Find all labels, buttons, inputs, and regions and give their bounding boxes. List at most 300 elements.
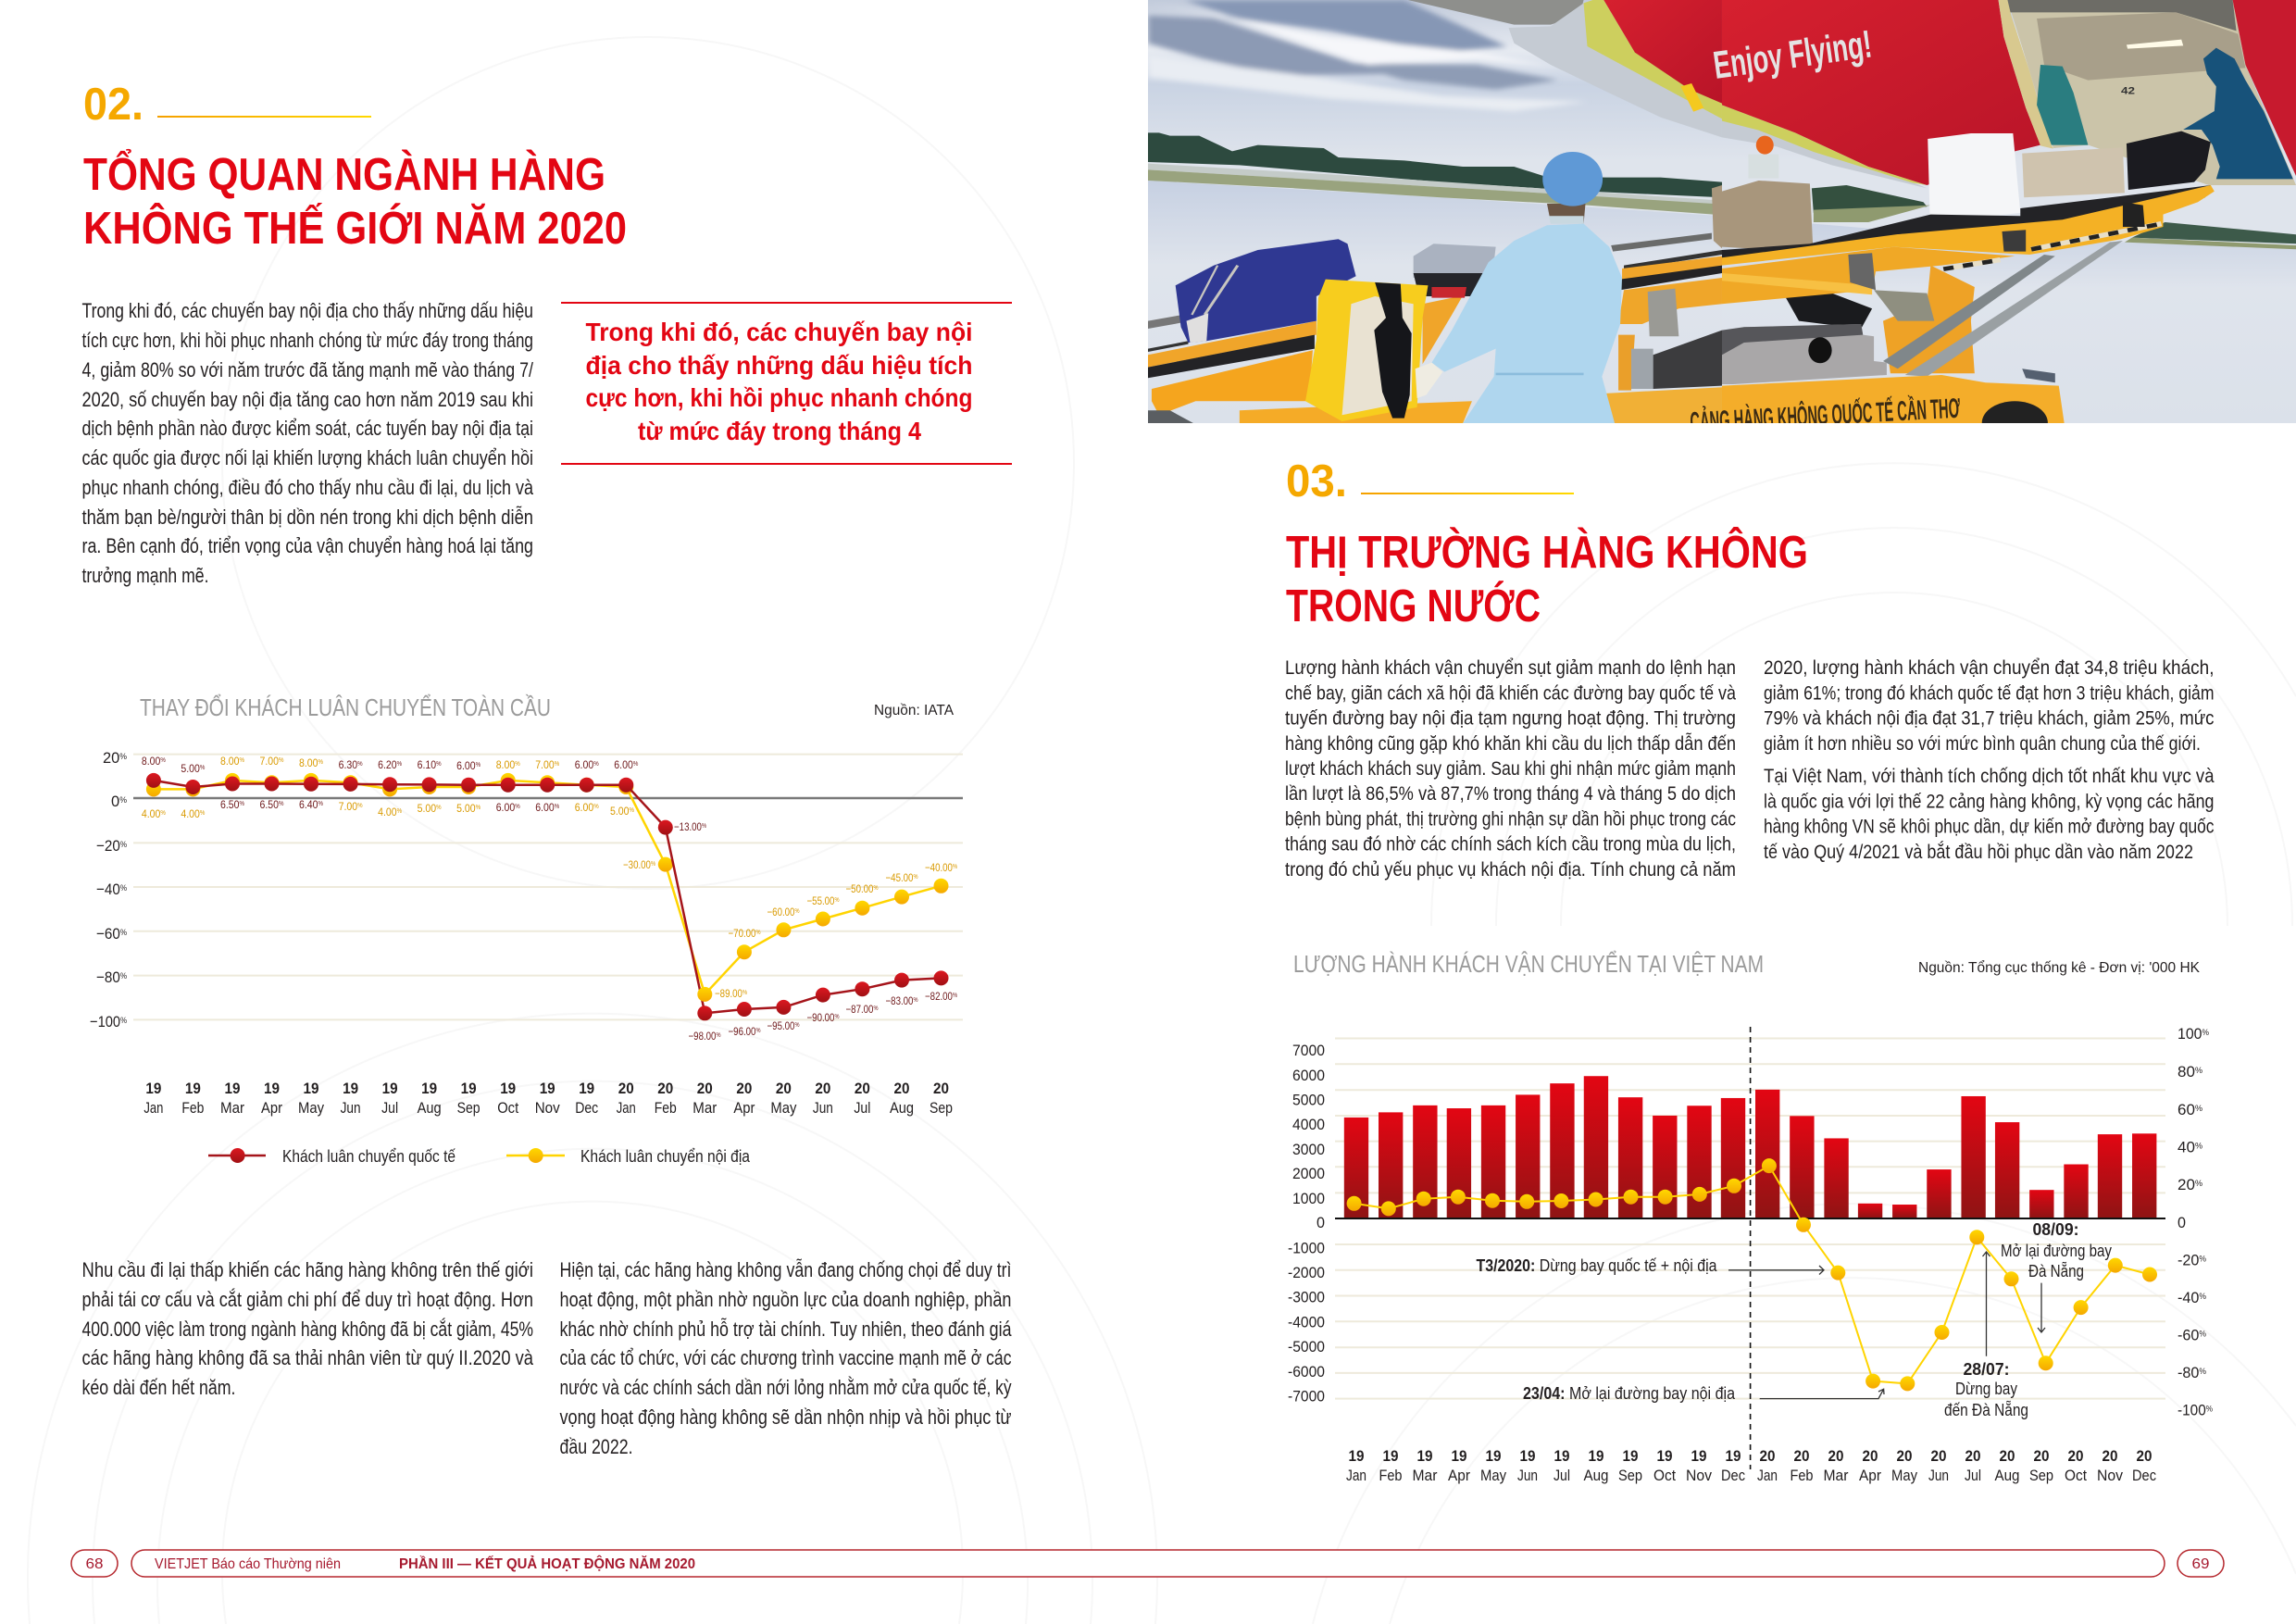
- blue bag: [1176, 239, 1356, 343]
- right axis labels: 60: [2177, 1101, 2195, 1118]
- title: section 02: TỔNG QUAN NGÀNH HÀNG: [83, 149, 605, 200]
- data labels: −70.00: [728, 927, 763, 940]
- x axis labels: 19: [461, 1080, 477, 1097]
- section number 03: 03.: [1286, 456, 1347, 506]
- x axis labels: 20: [1828, 1447, 1844, 1465]
- text block: section 03 column 1: [1285, 657, 1736, 881]
- x axis labels: 20: [776, 1080, 792, 1097]
- data labels: %: [913, 997, 918, 1004]
- x axis labels: Jun: [1928, 1467, 1949, 1484]
- title: section 03: TRONG NƯỚC: [1286, 581, 1541, 631]
- annotation: Da Nang reopening: Đà Nẵng: [2028, 1262, 2084, 1280]
- left axis labels: -7000: [1288, 1387, 1325, 1405]
- data labels: %: [357, 761, 363, 768]
- right axis labels: %: [2195, 1104, 2202, 1113]
- y axis labels: %: [120, 1016, 127, 1025]
- data labels: %: [515, 761, 520, 768]
- text block: section 02 intro: 4, giảm 80% so với năm trước đã tăng mạnh mẽ vào tháng 7/: [81, 358, 534, 381]
- x axis labels: 20: [2033, 1447, 2050, 1465]
- text block: section 02 intro: phục nhanh chóng, điều đó cho thấy nhu cầu đi lại, du lịch và: [81, 476, 534, 499]
- boxes: [2022, 147, 2125, 197]
- x axis labels: Jul: [381, 1099, 398, 1117]
- x axis labels: Feb: [1791, 1467, 1813, 1484]
- data labels: −87.00: [846, 1003, 880, 1016]
- text block: section 02 intro: ra. Bên cạnh đó, triển vọng của vận chuyển hàng hoá lại tăng: [81, 534, 533, 557]
- text block: section 03 column 2: giảm ít hơn nhiều so với mức bình quân chung của thế giới.: [1764, 733, 2201, 755]
- annotation: April reopening: 23/04: Mở lại đường bay nội địa: [1523, 1384, 1736, 1403]
- text block: lower right column: đầu 2022.: [559, 1435, 633, 1458]
- x axis labels: Mar: [1413, 1467, 1438, 1484]
- chart heading: Vietnam passengers: [1293, 950, 2200, 978]
- right axis labels: 20: [2177, 1176, 2195, 1193]
- x axis labels: Jun: [813, 1099, 833, 1117]
- text block: section 02 intro: Trong khi đó, các chuyến bay nội địa cho thấy những dấu hiệu: [81, 299, 533, 322]
- x axis labels: May: [1480, 1467, 1506, 1484]
- left axis labels: 0: [1316, 1214, 1325, 1231]
- y axis labels: −80: [96, 968, 123, 986]
- data labels: %: [515, 804, 520, 810]
- callout: pull quote: [561, 302, 1012, 465]
- data labels: 6.00: [456, 759, 478, 772]
- right axis labels: %: [2195, 1179, 2202, 1188]
- x axis labels: Nov: [2097, 1467, 2123, 1484]
- data labels: %: [397, 808, 402, 815]
- machine: [1722, 324, 1887, 384]
- y axis labels: 20: [103, 749, 120, 767]
- text block: lower left column: [81, 1258, 534, 1399]
- data labels: 5.00: [418, 802, 439, 815]
- right axis labels: %: [2199, 1330, 2206, 1339]
- data labels: 8.00: [496, 758, 518, 771]
- text block: section 03 column 1: tuyến đường bay nội địa tạm ngưng hoạt động. Thị trường: [1285, 707, 1736, 730]
- x axis labels: Mar: [693, 1099, 718, 1117]
- x axis labels: 20: [1965, 1447, 1981, 1465]
- right axis labels: %: [2199, 1292, 2206, 1301]
- x axis labels: 19: [1554, 1447, 1570, 1465]
- data labels: −45.00: [885, 871, 920, 884]
- text block: lower right column: nước và các chính sách dần nới lỏng nhằm mở cửa quốc tế, kỳ: [559, 1376, 1011, 1399]
- data labels: %: [476, 805, 480, 811]
- data labels: %: [834, 897, 839, 904]
- text block: section 02 intro: [81, 299, 534, 587]
- x axis labels: 19: [1691, 1447, 1707, 1465]
- x axis labels: 19: [1589, 1447, 1603, 1465]
- x axis labels: 20: [933, 1080, 949, 1097]
- annotation: Da Nang reopening: Mở lại đường bay: [2001, 1242, 2112, 1260]
- section number 02: 02.: [83, 80, 144, 130]
- data labels: 7.00: [339, 800, 360, 813]
- data labels: 6.30: [339, 758, 360, 771]
- text block: section 03 column 2: tế vào Quý 4/2021 và bắt đầu hồi phục dần vào năm 2022: [1764, 842, 2193, 863]
- text block: section 03 column 2: hàng không VN sẽ khôi phục dần, dự kiến mở đường bay quốc: [1764, 817, 2215, 837]
- data labels: −13.00: [674, 820, 708, 833]
- x axis labels: 19: [1383, 1447, 1398, 1465]
- data labels: %: [279, 801, 283, 807]
- right axis labels: %: [2202, 1028, 2209, 1037]
- x axis labels: 19: [1348, 1447, 1365, 1465]
- page number 68: 68: [85, 1556, 104, 1572]
- page number 69: [2177, 1550, 2224, 1577]
- data labels: %: [555, 761, 559, 768]
- data labels: 8.00: [142, 755, 163, 768]
- x axis labels: Sep: [930, 1099, 953, 1117]
- data labels: %: [742, 990, 747, 996]
- x axis labels: 20: [855, 1080, 870, 1097]
- conveyor left: [1148, 321, 1316, 368]
- page number 69: 69: [2192, 1556, 2210, 1572]
- data labels: 6.40: [299, 798, 320, 811]
- annotation: march stop: T3/2020: Dừng bay quốc tế + nội địa: [1476, 1256, 1717, 1275]
- callout: pull quote: Trong khi đó, các chuyến bay nội: [585, 318, 972, 346]
- data labels: %: [716, 1032, 720, 1039]
- worker: [1547, 204, 1586, 224]
- right axis labels: -80: [2177, 1364, 2201, 1381]
- data labels: −96.00: [728, 1025, 763, 1038]
- data labels: 8.00: [299, 756, 320, 769]
- x axis labels: Jan: [617, 1099, 636, 1117]
- x axis labels: Apr: [1859, 1467, 1881, 1484]
- wing and belly: [1408, 0, 1584, 25]
- x axis labels: Jan: [1346, 1467, 1366, 1484]
- x axis labels: Jan: [144, 1099, 163, 1117]
- text block: section 03 column 2: Tại Việt Nam, với thành tích chống dịch tốt nhất khu vực và: [1764, 766, 2215, 787]
- text block: section 03 column 1: lần lượt là 86,5% và 87,7% trong tháng 4 và tháng 5 do dịch: [1285, 783, 1736, 805]
- photo left half: sky, worker, yellow container: [1148, 0, 1722, 423]
- x axis labels: Nov: [535, 1099, 560, 1117]
- text block: lower right column: khác nhờ chính phủ hỗ trợ tài chính. Tuy nhiên, theo đánh giá: [559, 1318, 1012, 1341]
- data labels: −95.00: [767, 1019, 802, 1032]
- annotation: April reopening: [1523, 1384, 1884, 1403]
- text block: lower left column: 400.000 việc làm trong ngành hàng không đã bị cắt giảm, 45%: [81, 1318, 533, 1341]
- x axis labels: Dec: [1721, 1467, 1745, 1484]
- data labels: %: [794, 1022, 800, 1029]
- legend: global chart: Khách luân chuyển quốc tế: [282, 1147, 455, 1166]
- y axis labels: %: [120, 883, 127, 893]
- right axis labels: -60: [2177, 1326, 2201, 1344]
- text block: section 02 intro: 2020, số chuyến bay nội địa tăng cao hơn năm 2019 sau khi: [81, 388, 533, 411]
- running header pill: PHẦN III — KẾT QUẢ HOẠT ĐỘNG NĂM 2020: [399, 1555, 695, 1572]
- y axis labels: %: [120, 971, 127, 981]
- annotation: Da Nang stop: Dừng bay: [1955, 1380, 2017, 1398]
- title: section 03: THỊ TRƯỜNG HÀNG KHÔNG: [1286, 527, 1808, 578]
- data labels: %: [834, 1014, 839, 1020]
- text block: section 03 column 1: bệnh bùng phát, thị trường ghi nhận sự dần hồi phục trong các: [1285, 809, 1736, 830]
- data labels: %: [200, 810, 205, 817]
- chart heading: Vietnam passengers: Nguồn: Tổng cục thống kê - Đơn vị: '000 HK: [1918, 959, 2200, 976]
- rails: [1148, 315, 1183, 329]
- right axis labels: 100: [2177, 1025, 2203, 1043]
- data labels: 6.20: [378, 758, 399, 771]
- data labels: %: [436, 761, 442, 768]
- data labels: −89.00: [715, 987, 749, 1000]
- x axis labels: 20: [697, 1080, 713, 1097]
- data labels: %: [436, 805, 442, 811]
- x axis labels: 19: [500, 1080, 516, 1097]
- x axis labels: Apr: [733, 1099, 755, 1117]
- conveyor belt: [1722, 185, 2211, 262]
- x axis labels: Sep: [457, 1099, 480, 1117]
- x axis labels: 19: [1416, 1447, 1433, 1465]
- text block: section 03 column 2: là quốc gia với lợi thế 22 cảng hàng không, kỳ vọng các hãng: [1764, 791, 2215, 813]
- x axis labels: Oct: [2065, 1467, 2087, 1484]
- data labels: 4.00: [142, 807, 163, 820]
- x axis labels: [1346, 1447, 2156, 1484]
- y axis labels: %: [119, 752, 127, 761]
- text block: lower left column: các hãng hàng không đã sa thải nhân viên từ quý II.2020 và: [81, 1346, 534, 1369]
- text block: lower right column: của các tổ chức, với các chương trình vaccine mạnh mẽ ở các: [559, 1346, 1011, 1369]
- line series: [1347, 1158, 2157, 1391]
- data labels: 6.50: [220, 798, 242, 811]
- running header pill: VIETJET Báo cáo Thường niên: [155, 1556, 341, 1572]
- data labels: %: [913, 874, 918, 881]
- data labels: −83.00: [885, 994, 920, 1007]
- data labels: %: [318, 801, 323, 807]
- x axis labels: 20: [618, 1080, 634, 1097]
- x axis labels: Feb: [1379, 1467, 1402, 1484]
- text block: lower right column: Hiện tại, các hãng hàng không vẫn đang chống chọi để duy trì: [559, 1258, 1011, 1281]
- x axis labels: 20: [736, 1080, 752, 1097]
- series: domestic: [146, 773, 948, 994]
- combo chart: Vietnam passengers: [1288, 1025, 2213, 1484]
- x axis labels: [144, 1080, 953, 1117]
- text block: section 03 column 1: tháng sau đó nhờ các chính sách kích cầu trong mùa du lịch,: [1285, 833, 1736, 856]
- x axis labels: Apr: [261, 1099, 282, 1117]
- x axis labels: Aug: [1583, 1467, 1609, 1484]
- right axis labels: %: [2195, 1141, 2202, 1150]
- text block: section 03 column 1: Lượng hành khách vận chuyển sụt giảm mạnh do lệnh hạn: [1285, 657, 1736, 679]
- data labels: %: [397, 761, 402, 768]
- x axis labels: May: [1891, 1467, 1917, 1484]
- callout: pull quote: từ mức đáy trong tháng 4: [638, 417, 921, 445]
- left axis labels: 5000: [1292, 1091, 1325, 1109]
- x axis labels: Sep: [1618, 1467, 1642, 1484]
- x axis labels: 19: [1726, 1447, 1741, 1465]
- title: section 02: [83, 149, 627, 254]
- x axis labels: 20: [2102, 1447, 2118, 1465]
- x axis labels: Oct: [1653, 1467, 1676, 1484]
- x axis labels: 20: [2068, 1447, 2083, 1465]
- right axis labels: %: [2206, 1404, 2213, 1413]
- data labels: 7.00: [259, 755, 281, 768]
- x axis labels: 19: [145, 1080, 161, 1097]
- text block: section 03 column 1: chế bay, giãn cách xã hội đã khiến các đường bay quốc tế và: [1285, 683, 1736, 704]
- data labels: −90.00: [807, 1011, 842, 1024]
- x axis labels: 19: [540, 1080, 555, 1097]
- series: international: [146, 773, 948, 1020]
- y axis labels: %: [120, 840, 127, 849]
- text block: section 03 column 2: [1764, 657, 2215, 863]
- y axis labels: %: [120, 928, 127, 937]
- data labels: −60.00: [767, 906, 802, 918]
- text block: lower left column: Nhu cầu đi lại thấp khiến các hãng hàng không trên thế giới: [81, 1258, 533, 1281]
- x axis labels: Jul: [1965, 1467, 1981, 1484]
- x axis labels: 20: [894, 1080, 909, 1097]
- x axis labels: Feb: [655, 1099, 677, 1117]
- annotation: Da Nang reopening: 08/09:: [2033, 1220, 2079, 1239]
- data labels: 6.50: [259, 798, 281, 811]
- vehicle: [1722, 375, 2065, 423]
- data labels: %: [953, 993, 957, 999]
- right axis labels: %: [2195, 1066, 2202, 1075]
- text block: lower left column: kéo dài đến hết năm.: [81, 1376, 235, 1399]
- data labels: %: [873, 1006, 878, 1012]
- y axis labels: %: [119, 795, 127, 805]
- right axis labels: [2177, 1025, 2213, 1418]
- x axis labels: Feb: [181, 1099, 204, 1117]
- yellow container: [1305, 280, 1428, 421]
- legend: global chart: Khách luân chuyển nội địa: [580, 1147, 751, 1166]
- x axis labels: 19: [1622, 1447, 1639, 1465]
- x axis labels: 19: [1520, 1447, 1535, 1465]
- callout: pull quote: cực hơn, khi hồi phục nhanh chóng: [585, 383, 972, 412]
- text block: lower right column: hoạt động, một phần nhờ nguồn lực của doanh nghiệp, phần: [559, 1288, 1011, 1311]
- photo right half: fuselage, cargo door, conveyor: [1722, 0, 2296, 444]
- x axis labels: 20: [815, 1080, 830, 1097]
- data labels: 6.00: [496, 801, 518, 814]
- data labels: 4.00: [378, 806, 399, 818]
- text block: section 03 column 1: trong đó chủ yếu phục vụ khách nội địa. Tính chung cả năm: [1285, 859, 1736, 881]
- left axis labels: 3000: [1292, 1141, 1325, 1158]
- x axis labels: Dec: [2132, 1467, 2156, 1484]
- x axis labels: Aug: [1994, 1467, 2020, 1484]
- data labels: %: [630, 807, 634, 814]
- left axis labels: 4000: [1292, 1116, 1325, 1133]
- left axis labels: [1288, 1042, 1325, 1405]
- data labels: %: [633, 761, 638, 768]
- chart heading: global passengers: [140, 693, 954, 721]
- data labels: 6.00: [575, 801, 596, 814]
- line chart: global passenger change: [90, 749, 963, 1117]
- data labels: %: [794, 908, 800, 915]
- left axis labels: 1000: [1292, 1190, 1325, 1207]
- right axis labels: 0: [2177, 1214, 2186, 1231]
- x axis labels: Dec: [575, 1099, 599, 1117]
- data labels: %: [702, 823, 706, 830]
- text block: section 03 column 1: hàng không cũng gặp khó khăn khi cầu du lịch thấp dẫn đến: [1285, 733, 1736, 755]
- text block: section 03 column 2: 2020, lượng hành khách vận chuyển đạt 34,8 triệu khách,: [1764, 657, 2215, 679]
- data labels: %: [755, 1028, 761, 1034]
- text block: section 03 column 1: lượt khách khách suy giảm. Sau khi ghi nhận mức giảm mạnh: [1285, 758, 1736, 780]
- data labels: %: [318, 759, 323, 766]
- chart heading: Vietnam passengers: LƯỢNG HÀNH KHÁCH VẬN CHUYỂN TẠI VIỆT NAM: [1293, 950, 1764, 978]
- y axis labels: −40: [96, 881, 123, 898]
- x axis labels: Sep: [2029, 1467, 2053, 1484]
- x axis labels: Jun: [341, 1099, 361, 1117]
- title: section 03: [1286, 527, 1808, 631]
- data labels: %: [357, 803, 363, 809]
- data labels: 6.00: [614, 758, 636, 771]
- data labels: 6.10: [418, 758, 439, 771]
- text block: section 02 intro: các quốc gia được nối lại khiến lượng khách luân chuyển hồi: [81, 446, 533, 469]
- callout: pull quote: địa cho thấy những dấu hiệu tích: [585, 351, 972, 380]
- left axis labels: -2000: [1288, 1264, 1325, 1281]
- right axis labels: 80: [2177, 1063, 2195, 1081]
- data labels: −40.00: [925, 861, 959, 874]
- x axis labels: 20: [2000, 1447, 2015, 1465]
- x axis labels: Aug: [418, 1099, 442, 1117]
- data labels: %: [160, 757, 166, 764]
- photo text: enjoy flying: Enjoy Flying!: [1711, 21, 1875, 87]
- data labels: %: [200, 765, 205, 771]
- data labels: −50.00: [846, 882, 880, 895]
- x axis labels: 20: [1931, 1447, 1946, 1465]
- left axis labels: 7000: [1292, 1042, 1325, 1059]
- x axis labels: 20: [1896, 1447, 1913, 1465]
- data labels: %: [555, 804, 559, 810]
- right axis labels: 40: [2177, 1139, 2195, 1156]
- annotation: Da Nang stop: đến Đà Nẵng: [1944, 1401, 2028, 1419]
- x axis labels: Jul: [854, 1099, 870, 1117]
- x axis labels: 19: [1657, 1447, 1672, 1465]
- text block: lower right column: vọng hoạt động hàng không sẽ dần nhộn nhịp và hồi phục từ: [559, 1405, 1012, 1429]
- data labels: %: [160, 810, 166, 817]
- y axis labels: [90, 749, 127, 1031]
- fuselage: [1722, 120, 1927, 188]
- data labels: 5.00: [610, 805, 631, 818]
- y axis labels: −100: [90, 1013, 125, 1031]
- x axis labels: Oct: [497, 1099, 518, 1117]
- x axis labels: 19: [185, 1080, 201, 1097]
- footer bar: [71, 1550, 2224, 1577]
- x axis labels: 20: [1759, 1447, 1776, 1465]
- right axis labels: -40: [2177, 1289, 2201, 1306]
- running header pill: [131, 1550, 2165, 1577]
- data labels: %: [240, 757, 244, 764]
- x axis labels: 19: [304, 1080, 318, 1097]
- x axis labels: 19: [1452, 1447, 1466, 1465]
- annotation: Da Nang reopening: [2001, 1220, 2112, 1332]
- left axis labels: -4000: [1288, 1313, 1325, 1331]
- y axis labels: 0: [111, 793, 119, 810]
- data labels: −82.00: [925, 990, 959, 1003]
- y axis labels: −20: [96, 837, 123, 855]
- text block: section 03 column 2: 79% và khách nội địa đạt 31,7 triệu khách, giảm 25%, mức: [1764, 707, 2215, 730]
- x axis labels: 20: [2137, 1447, 2152, 1465]
- left axis labels: -6000: [1288, 1363, 1325, 1380]
- gray suitcase: [1414, 244, 1496, 278]
- data labels: 5.00: [181, 762, 203, 775]
- photo: cargo loading on aircraft: [1148, 0, 2296, 444]
- data labels: %: [953, 864, 957, 870]
- x axis labels: Mar: [1824, 1467, 1849, 1484]
- data labels: %: [651, 861, 655, 868]
- data labels: %: [593, 761, 599, 768]
- x axis labels: 19: [264, 1080, 280, 1097]
- data labels: %: [593, 804, 599, 810]
- x axis labels: May: [770, 1099, 797, 1117]
- data labels: 7.00: [535, 758, 557, 771]
- x axis labels: Aug: [890, 1099, 914, 1117]
- left axis labels: -3000: [1288, 1289, 1325, 1305]
- left axis labels: 2000: [1292, 1165, 1325, 1182]
- left axis labels: 6000: [1292, 1067, 1325, 1084]
- text block: section 02 intro: trưởng mạnh mẽ.: [81, 564, 209, 587]
- annotation: Da Nang stop: 28/07:: [1963, 1360, 2009, 1379]
- right axis labels: -20: [2177, 1252, 2201, 1268]
- photo right half: fuselage, cargo door, conveyor: 42: [2121, 85, 2135, 96]
- data labels: −55.00: [807, 894, 842, 907]
- data labels: 4.00: [181, 807, 203, 820]
- right axis labels: %: [2199, 1367, 2206, 1376]
- x axis labels: Mar: [220, 1099, 244, 1117]
- x axis labels: Jan: [1757, 1467, 1778, 1484]
- data labels: %: [240, 801, 244, 807]
- bars: [1344, 1076, 2156, 1218]
- data labels: −30.00: [623, 858, 657, 871]
- photo: cargo loading on aircraft: CẢNG HÀNG KHÔNG QUỐC TẾ CẦN THƠ: [1690, 393, 1961, 438]
- data labels: %: [873, 885, 878, 892]
- text block: lower left column: phải tái cơ cấu và cắt giảm chi phí để duy trì hoạt động. Hơn: [81, 1288, 533, 1311]
